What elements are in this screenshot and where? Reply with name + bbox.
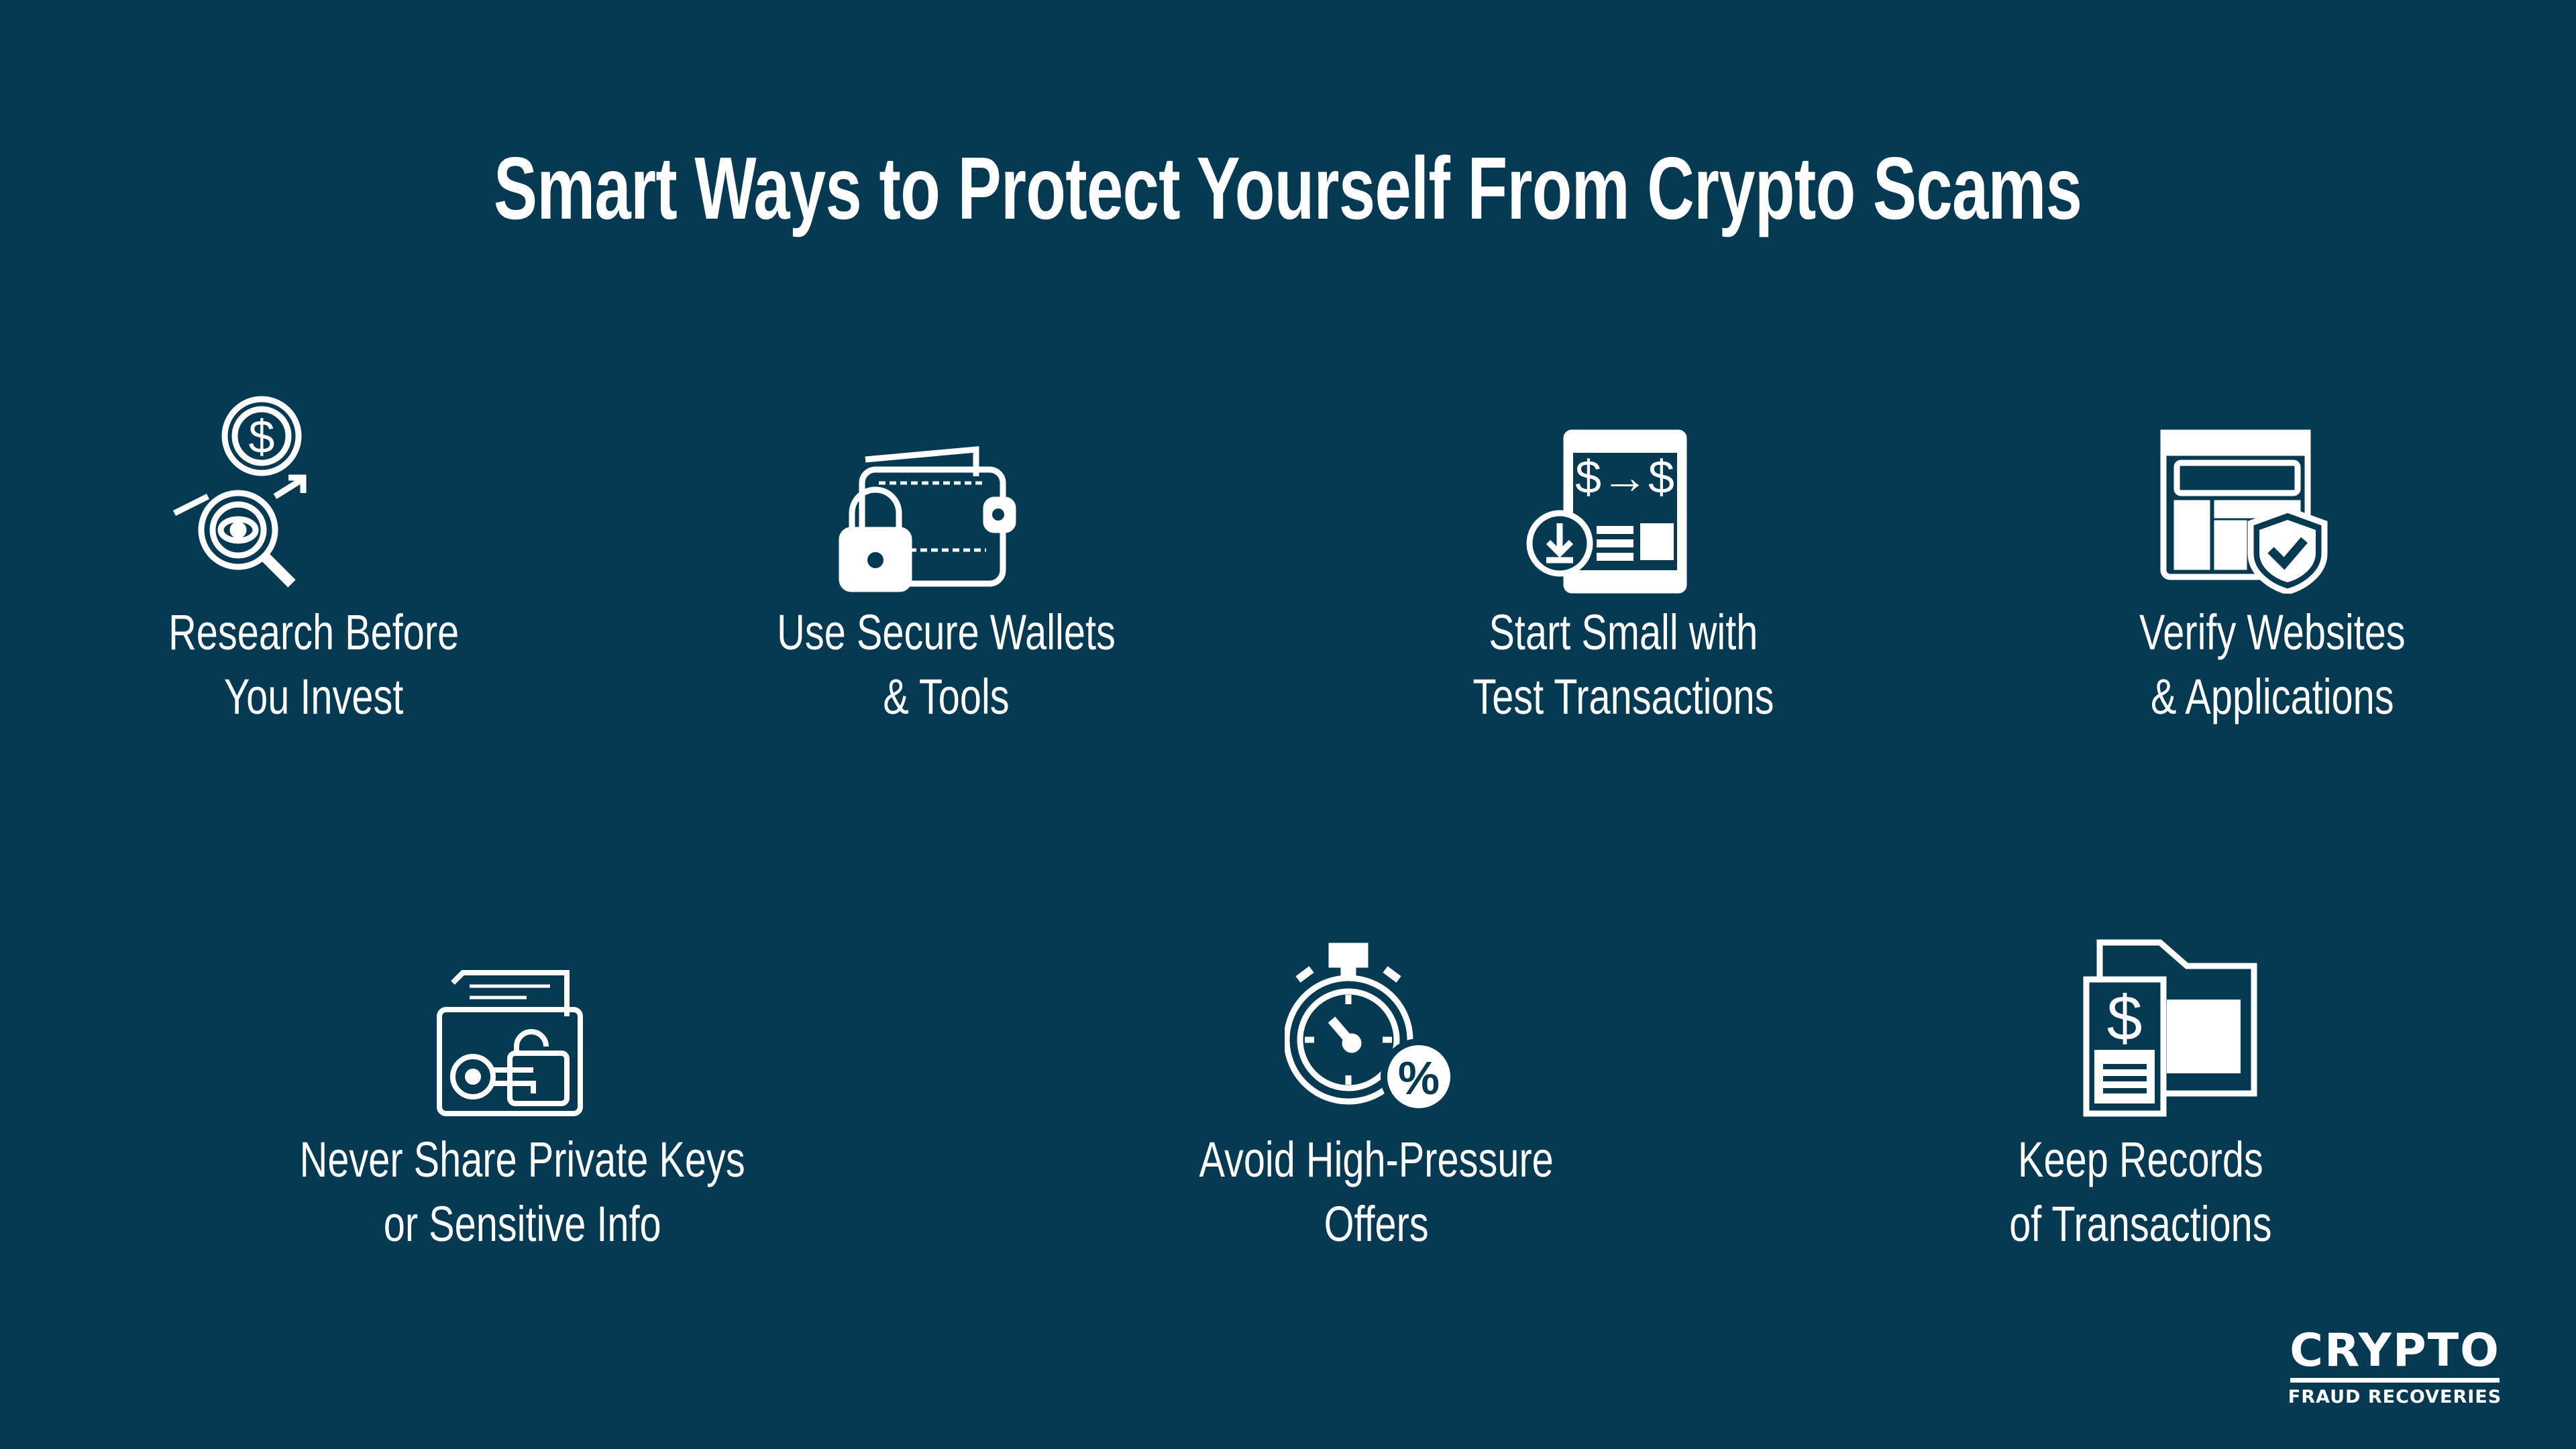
label: private keys: Never Share Private Keys	[300, 1132, 745, 1187]
label: research	[168, 604, 460, 724]
label: test transactions: Test Transactions	[1472, 669, 1774, 724]
icon: wallet	[839, 446, 1016, 592]
icon: records	[2084, 939, 2257, 1116]
icon: stopwatch: %	[1398, 1052, 1440, 1104]
label: wallet	[777, 604, 1116, 724]
icon: research: $	[249, 411, 274, 463]
icon: stopwatch	[1285, 943, 1450, 1108]
label: stopwatch	[1199, 1132, 1554, 1252]
label: private keys	[300, 1132, 745, 1252]
logo: FRAUD RECOVERIES	[2288, 1387, 2502, 1407]
label: records: Keep Records	[2018, 1132, 2263, 1187]
icon: research	[173, 396, 306, 588]
label: verify websites	[2139, 604, 2405, 724]
label: research: Research Before	[168, 604, 460, 660]
icon: test transactions	[1527, 429, 1686, 593]
label: verify websites: & Applications	[2151, 669, 2394, 724]
label: records	[2009, 1132, 2272, 1252]
icon: records: $	[2107, 983, 2142, 1054]
icon: private keys	[437, 970, 583, 1116]
label: research: You Invest	[224, 669, 404, 724]
label: records: of Transactions	[2009, 1196, 2272, 1252]
logo	[2288, 1324, 2502, 1407]
logo: CRYPTO	[2290, 1324, 2500, 1377]
label: stopwatch: Avoid High-Pressure	[1199, 1132, 1554, 1187]
title: Smart Ways to Protect Yourself From Crypto Scams	[494, 139, 2082, 237]
label: verify websites: Verify Websites	[2139, 604, 2405, 660]
label: test transactions	[1472, 604, 1774, 724]
label: wallet: Use Secure Wallets	[777, 604, 1116, 660]
label: private keys: or Sensitive Info	[384, 1196, 661, 1252]
icon: verify websites	[2160, 429, 2328, 594]
label: stopwatch: Offers	[1324, 1196, 1429, 1252]
label: wallet: & Tools	[883, 669, 1010, 724]
icon: test transactions: $→$	[1575, 451, 1674, 503]
label: test transactions: Start Small with	[1489, 604, 1758, 660]
